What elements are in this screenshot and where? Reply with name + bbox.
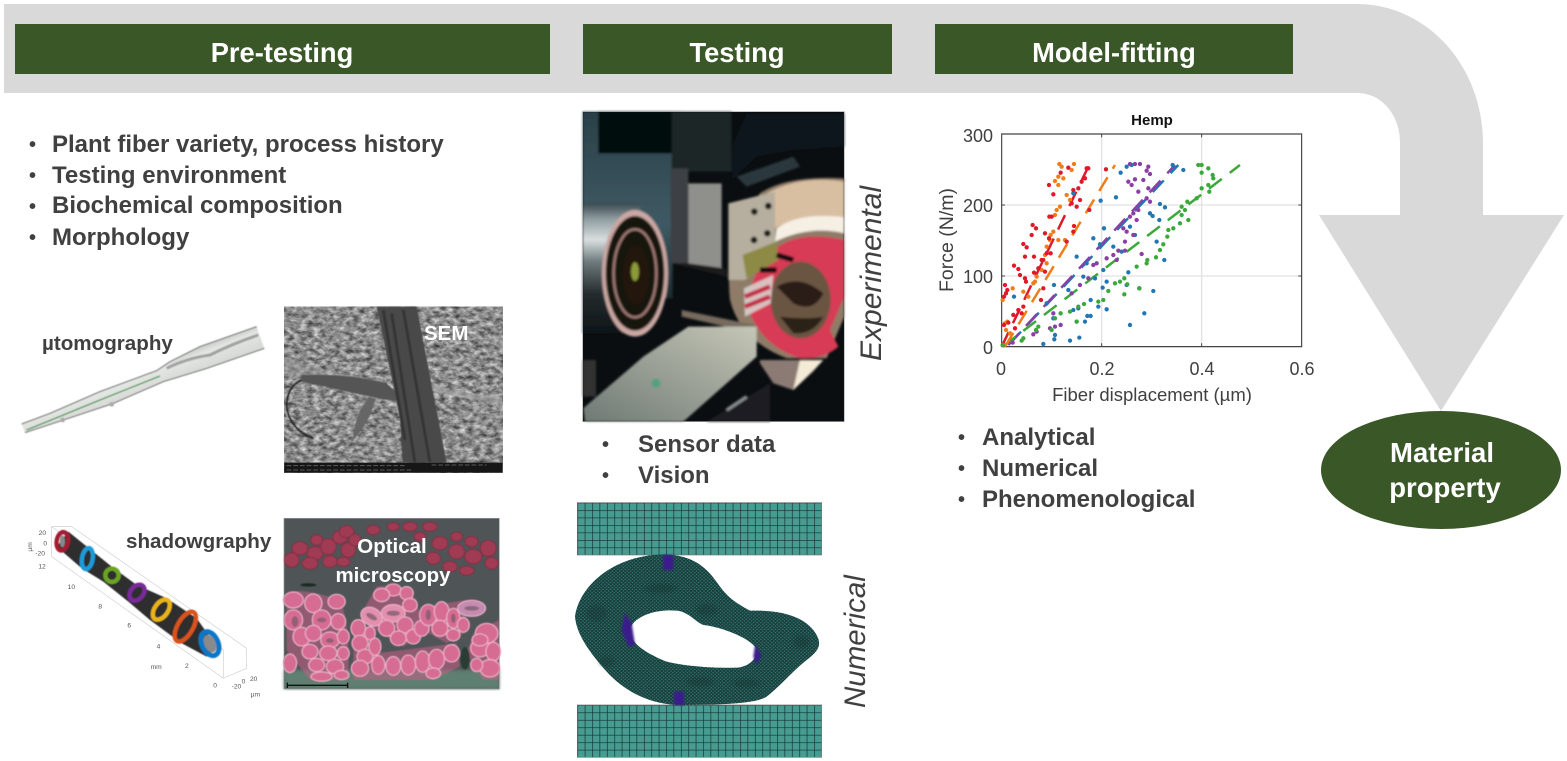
chart: Hemp force vs fiber displacement: 0.2 (1089, 359, 1115, 379)
heading: Testing: Testing (689, 37, 785, 68)
photo: experimental test setup (583, 112, 844, 422)
image: shadowgraphy 3D plot: -20 (232, 683, 242, 690)
simulation: finite-element mesh (575, 503, 822, 757)
image: optical microscopy (283, 518, 501, 689)
image: shadowgraphy 3D plot: 4 (157, 643, 161, 650)
testing bullet list: Vision (638, 462, 710, 489)
chart title: Hemp (1131, 112, 1173, 129)
image: shadowgraphy 3D plot: 20 (39, 530, 46, 537)
chart: Hemp force vs fiber displacement: 0 (996, 359, 1006, 379)
testing bullet list (602, 431, 776, 489)
image: shadowgraphy 3D plot: 0 (213, 683, 217, 690)
model-fitting bullet list: • (958, 458, 965, 480)
pre-testing bullet list: • (29, 134, 36, 156)
outcome: Material property: property (1389, 472, 1501, 503)
pre-testing bullet list: • (29, 196, 36, 218)
model-fitting bullet list: • (958, 427, 965, 449)
y axis label: Force (N/m) (936, 188, 958, 292)
chart: Hemp force vs fiber displacement: 300 (963, 126, 993, 146)
chart: Hemp force vs fiber displacement: 0.6 (1289, 359, 1315, 379)
chart: Hemp force vs fiber displacement (936, 112, 1315, 405)
testing bullet list: • (602, 465, 609, 487)
heading: Model-fitting: Model-fitting (1032, 37, 1196, 68)
image: shadowgraphy 3D plot: 10 (68, 584, 75, 591)
image: shadowgraphy 3D plot: 20 (250, 676, 258, 683)
testing bullet list: • (602, 434, 609, 456)
heading: Testing (583, 24, 892, 74)
image: µtomography fiber (22, 327, 264, 433)
pre-testing bullet list: • (29, 165, 36, 187)
model-fitting bullet list: Analytical (982, 424, 1095, 451)
image: shadowgraphy 3D plot (27, 527, 260, 699)
label: µtomography: µtomography (42, 332, 173, 355)
sample block (682, 310, 757, 330)
pre-testing bullet list: Morphology (52, 224, 190, 251)
x axis label: Fiber displacement (µm) (1052, 384, 1252, 405)
pre-testing bullet list: Testing environment (52, 162, 286, 189)
outcome: Material property (1321, 411, 1561, 529)
label: Numerical: Numerical (839, 574, 872, 708)
pre-testing bullet list: Biochemical composition (52, 192, 343, 219)
label: SEM: SEM (424, 322, 468, 345)
label: Optical microscopy: microscopy (335, 564, 451, 587)
label: Optical microscopy: Optical (357, 535, 427, 558)
image: shadowgraphy 3D plot: 0 (242, 678, 246, 685)
model-fitting bullet list: Phenomenological (982, 486, 1195, 513)
outcome: Material property: Material (1390, 437, 1494, 468)
pre-testing bullet list (29, 131, 444, 251)
heading: Model-fitting (935, 24, 1293, 74)
label: shadowgraphy: shadowgraphy (126, 530, 272, 553)
heading: Pre-testing: Pre-testing (211, 37, 353, 68)
testing bullet list: Sensor data (638, 431, 776, 458)
image: SEM micrograph (284, 307, 503, 473)
chart: Hemp force vs fiber displacement: 0.4 (1189, 359, 1215, 379)
flow arrow (4, 4, 1564, 411)
image: shadowgraphy 3D plot: 8 (98, 603, 102, 610)
lens (583, 203, 640, 333)
chart: Hemp force vs fiber displacement: 0 (983, 338, 993, 358)
pre-testing bullet list: Plant fiber variety, process history (52, 131, 444, 158)
image: shadowgraphy 3D plot: 2 (185, 663, 189, 670)
model-fitting bullet list: Numerical (982, 455, 1098, 482)
heading: Pre-testing (15, 24, 550, 74)
image: shadowgraphy 3D plot: -20 (35, 551, 45, 558)
mount (671, 168, 688, 263)
image: shadowgraphy 3D plot: 12 (38, 563, 46, 570)
pre-testing bullet list: • (29, 227, 36, 249)
image: shadowgraphy 3D plot: 0 (43, 541, 47, 548)
chart: Hemp force vs fiber displacement: 200 (963, 196, 993, 216)
image: shadowgraphy 3D plot: µm (251, 692, 260, 699)
image: shadowgraphy 3D plot: 6 (127, 622, 131, 629)
image: shadowgraphy 3D plot: µm (27, 542, 34, 552)
chart: Hemp force vs fiber displacement: 100 (963, 267, 993, 287)
image: shadowgraphy 3D plot: mm (151, 664, 162, 671)
disk (729, 178, 844, 358)
clamp (728, 192, 775, 280)
model-fitting bullet list (958, 424, 1195, 513)
label: Experimental: Experimental (855, 185, 888, 361)
model-fitting bullet list: • (958, 489, 965, 511)
